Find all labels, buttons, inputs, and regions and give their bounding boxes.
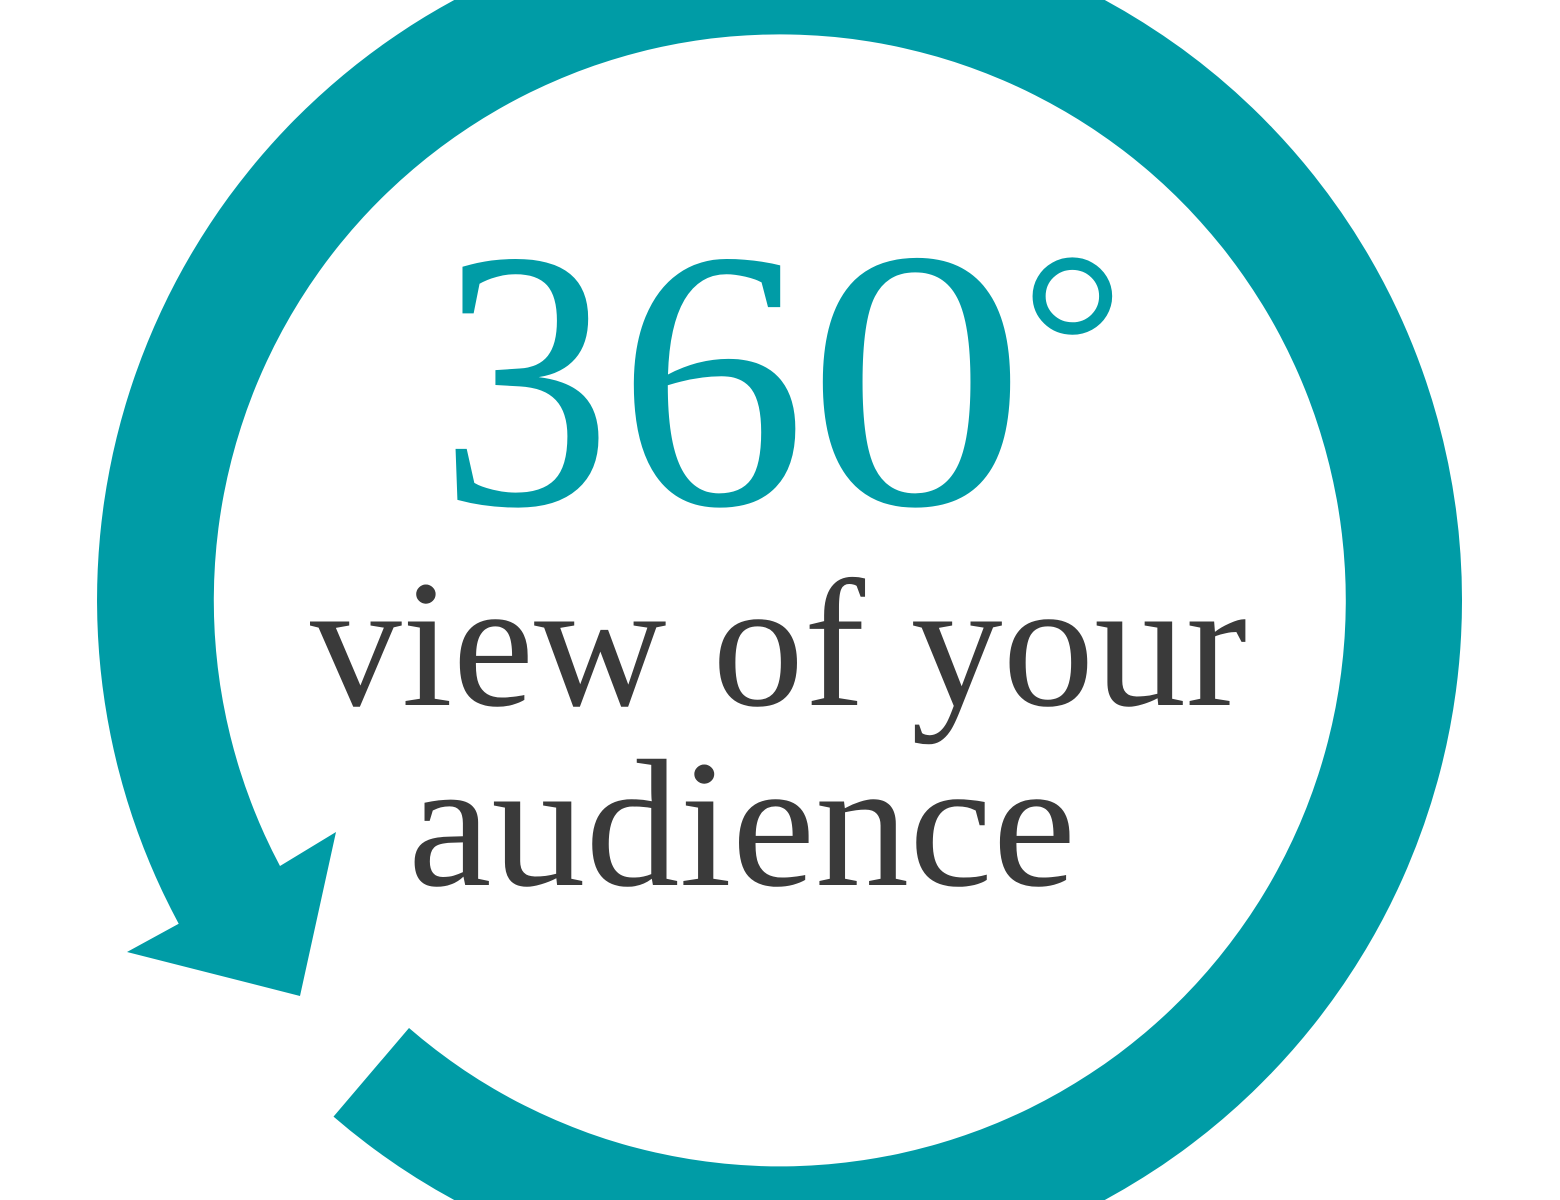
heading: 360 degrees: 0 bbox=[806, 175, 1027, 585]
heading: 360 degrees: 6 bbox=[618, 175, 807, 585]
heading: 360 degrees bbox=[439, 175, 1125, 585]
heading: 360 degrees: ° bbox=[1020, 201, 1125, 483]
text: view of your: view of your bbox=[310, 544, 1247, 745]
heading: 360 degrees: 3 bbox=[439, 175, 612, 585]
text: audience: audience bbox=[408, 724, 1076, 925]
